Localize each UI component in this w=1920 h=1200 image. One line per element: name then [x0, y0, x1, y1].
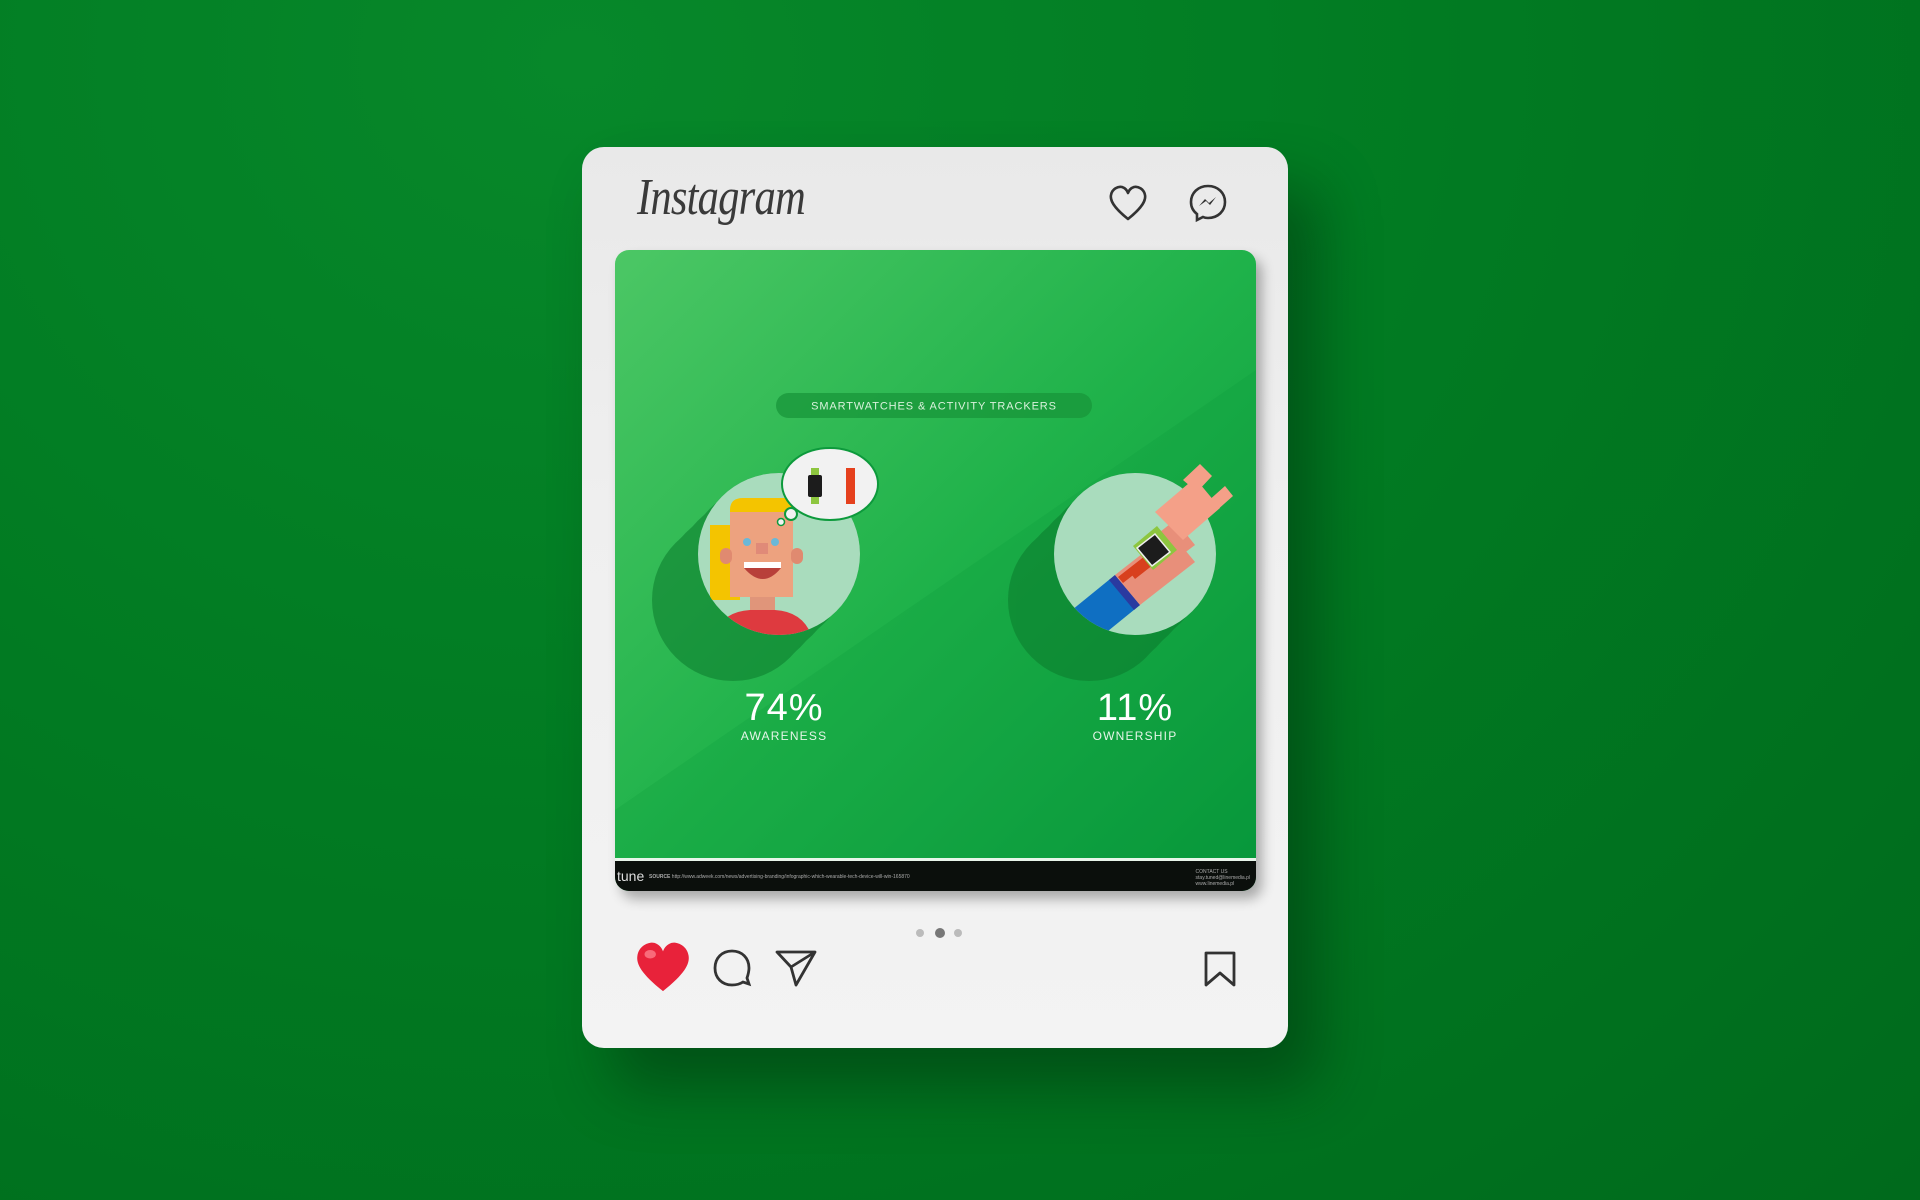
bottom strip [615, 858, 1256, 891]
carousel dots [916, 928, 962, 938]
post image: infographic [615, 250, 1256, 891]
stat: 11% ownership: OWNERSHIP [1093, 729, 1177, 743]
shadow: left [652, 473, 860, 681]
icon: messenger [1190, 184, 1226, 222]
icon: comment [714, 950, 752, 986]
stat: 74% awareness [741, 687, 827, 743]
icon: liked heart [637, 942, 689, 992]
illustration: person awareness [698, 473, 860, 650]
thought bubble with devices [778, 448, 878, 526]
pill title: SMARTWATCHES & ACTIVITY TRACKERS [811, 400, 1057, 412]
icon: heart outline [1110, 186, 1146, 220]
footer: source text: SOURCE http://www.adweek.com/news/advertising-branding/infographic-which-wearable-tech-device-will-win-165870 [649, 874, 910, 880]
icon: send [776, 950, 816, 986]
shadow: right [1008, 473, 1216, 681]
logo: Instagram wordmark: Instagram [637, 169, 805, 226]
footer: contact: stay.tuned@linemedia.pl [1196, 875, 1250, 881]
icon: bookmark [1204, 952, 1236, 986]
footer: contact [1196, 869, 1250, 887]
stat: 74% awareness: 74% [744, 687, 824, 729]
stat: 11% ownership: 11% [1097, 687, 1173, 729]
stat: 74% awareness: AWARENESS [741, 729, 827, 743]
pill title [776, 393, 1092, 418]
footer: brand: tune [617, 868, 644, 884]
stat: 11% ownership [1093, 687, 1177, 743]
card: instagram post frame [582, 147, 1288, 1048]
footer: contact: www.linemedia.pl [1196, 881, 1234, 887]
illustration: wrist ownership [1054, 464, 1233, 635]
footer: contact: CONTACT US [1196, 869, 1228, 875]
